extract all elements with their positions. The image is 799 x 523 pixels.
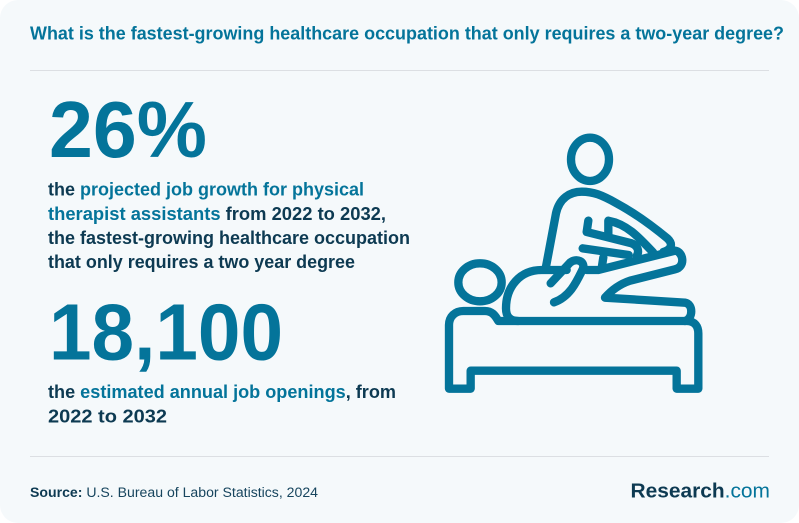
logo: Research.com: Research.com [630,480,770,502]
patient head [458,263,502,301]
stat: 18,100: 18,100 [49,288,283,376]
patient back and leg [506,270,567,321]
table [449,311,698,389]
stat: 26%: 26% [49,85,207,174]
text block: job growth description: the fastest-growing healthcare occupation [48,228,410,248]
therapist head [571,138,609,181]
text block: annual job openings description: the estimated annual job openings, from [48,382,396,402]
text block: job growth description: therapist assistants from 2022 to 2032, [48,204,386,224]
text block: annual job openings description: 2022 to 2032 [48,406,167,426]
source note: Source: U.S. Bureau of Labor Statistics, 2024 [30,485,319,500]
title: What is the fastest-growing healthcare occupation that only requires a two-year degree? [30,24,784,44]
text block: annual job openings description [48,382,396,426]
therapist hand on patient [551,260,583,302]
text block: job growth description: the projected job growth for physical [48,180,364,200]
text block: job growth description: that only requires a two year degree [48,252,355,272]
therapist arms [587,221,638,256]
icon: therapist massaging patient on table [449,138,698,389]
therapist torso [546,192,671,267]
text block: job growth description [48,180,410,272]
